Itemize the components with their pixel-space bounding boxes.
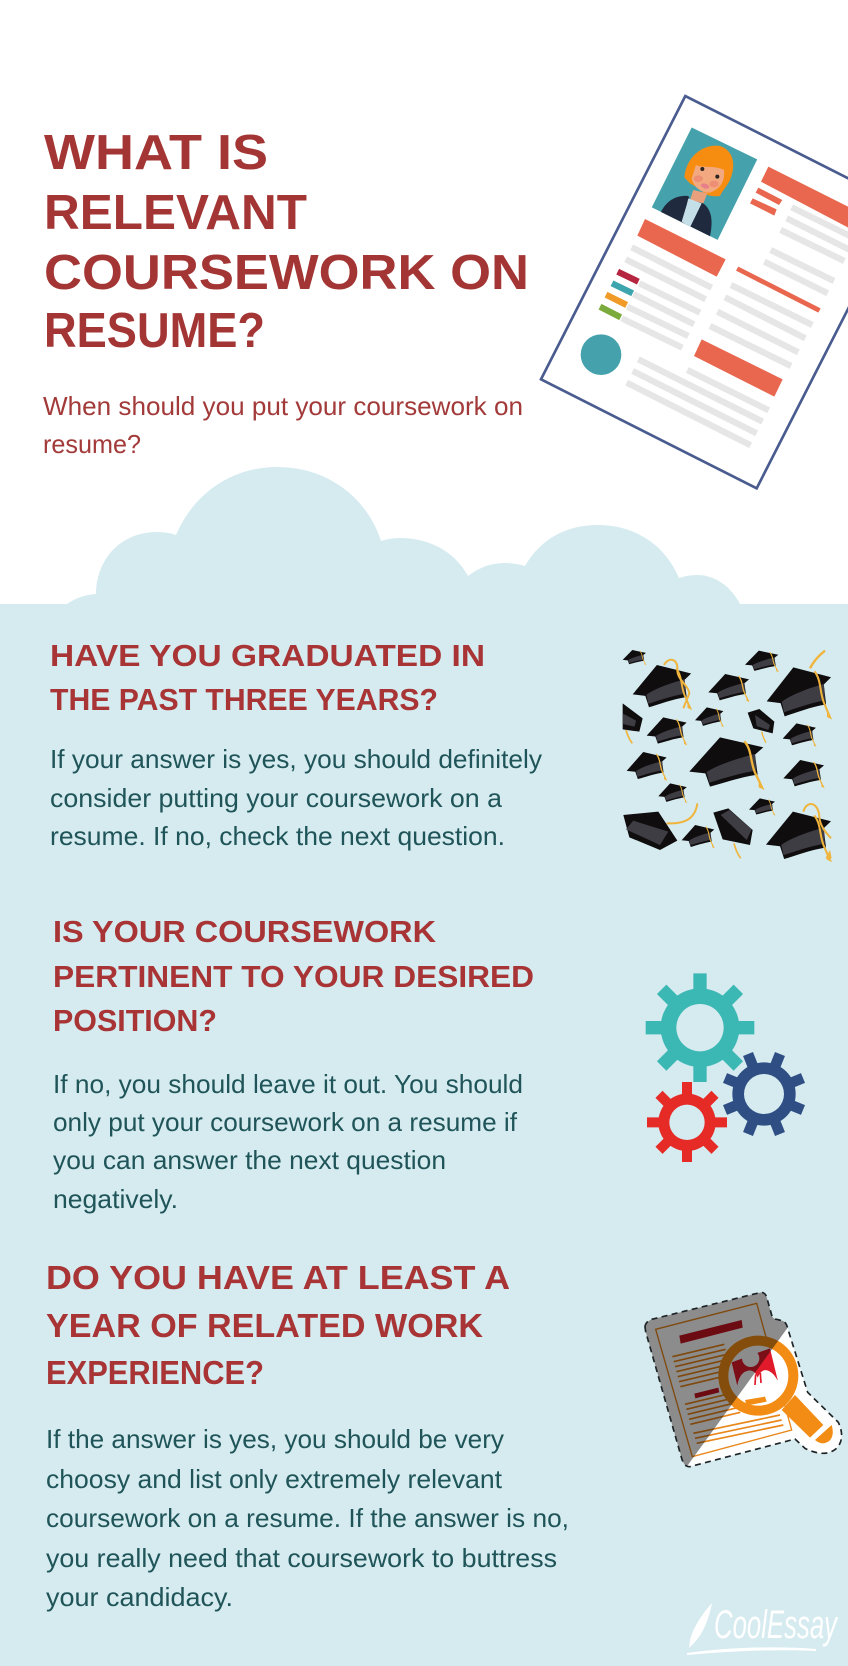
heading: question 1: THE PAST THREE YEARS? xyxy=(50,682,438,717)
icon: portrait photo xyxy=(652,127,757,240)
cloud xyxy=(67,467,740,604)
text: answer 1 xyxy=(50,744,542,851)
subtitle: When should you put your coursework on xyxy=(43,391,523,421)
text: answer 2: you can answer the next question xyxy=(53,1145,446,1175)
heading: question 2: POSITION? xyxy=(53,1003,217,1038)
title: RELEVANT xyxy=(44,186,307,240)
background panel xyxy=(0,604,848,1666)
icon: graduation caps xyxy=(623,650,832,862)
text: answer 2: only put your coursework on a resume if xyxy=(53,1107,518,1137)
text: answer 3: you really need that coursework to buttress xyxy=(46,1543,557,1573)
text: answer 3: coursework on a resume. If the answer is no, xyxy=(46,1503,569,1533)
heading: question 2 xyxy=(53,914,534,1038)
icon: magnifier over resume sticker xyxy=(644,1292,842,1468)
icon: resume document xyxy=(541,96,848,488)
icon: gears xyxy=(646,973,803,1162)
heading: question 1: HAVE YOU GRADUATED IN xyxy=(50,638,485,673)
text: answer 3: choosy and list only extremely relevant xyxy=(46,1464,503,1494)
heading: question 1 xyxy=(50,638,485,717)
heading: question 3: DO YOU HAVE AT LEAST A xyxy=(46,1259,510,1296)
heading: question 3 xyxy=(46,1259,510,1391)
heading: question 2: IS YOUR COURSEWORK xyxy=(53,914,437,949)
text: answer 3: your candidacy. xyxy=(46,1582,233,1612)
title: RESUME? xyxy=(44,304,265,358)
text: answer 1: If your answer is yes, you should definitely xyxy=(50,744,542,774)
title: WHAT IS xyxy=(44,126,268,180)
subtitle xyxy=(43,391,523,459)
title: COURSEWORK ON xyxy=(44,246,529,300)
heading: question 3: YEAR OF RELATED WORK xyxy=(46,1307,483,1344)
text: answer 2: If no, you should leave it out. You should xyxy=(53,1069,523,1099)
heading: question 3: EXPERIENCE? xyxy=(46,1354,264,1391)
text: answer 3 xyxy=(46,1424,569,1612)
icon: pen nib xyxy=(689,1603,712,1648)
subtitle: resume? xyxy=(43,429,141,459)
text: answer 2: negatively. xyxy=(53,1184,178,1214)
logo: CoolEssay xyxy=(687,1603,839,1655)
text: answer 1: resume. If no, check the next question. xyxy=(50,821,505,851)
text: answer 2 xyxy=(53,1069,523,1214)
heading: question 2: PERTINENT TO YOUR DESIRED xyxy=(53,959,534,994)
text: answer 1: consider putting your coursework on a xyxy=(50,783,503,813)
text: answer 3: If the answer is yes, you should be very xyxy=(46,1424,504,1454)
title xyxy=(44,126,529,358)
